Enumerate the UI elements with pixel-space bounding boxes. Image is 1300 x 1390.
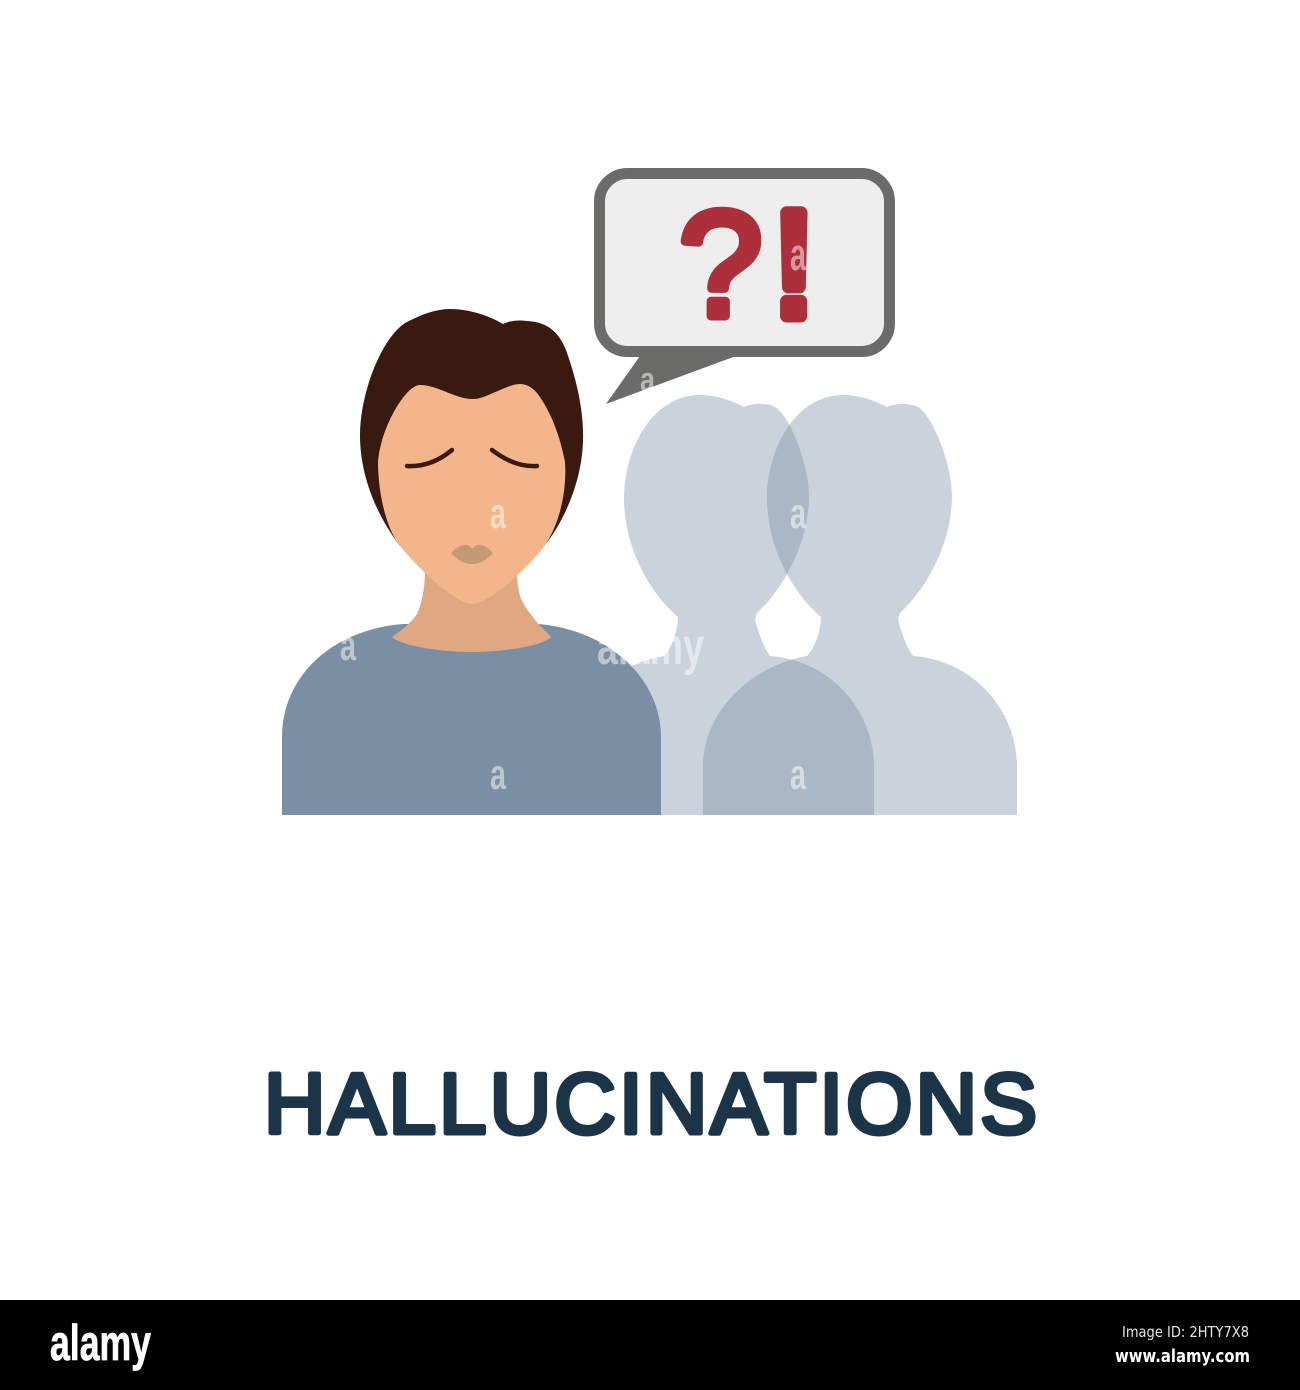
footer logo: alamy	[50, 1315, 151, 1371]
man: main figure	[282, 309, 661, 815]
watermarks: alamy	[597, 618, 704, 676]
watermarks: a	[790, 751, 807, 799]
watermarks: a	[490, 751, 507, 799]
question mark and exclamation mark: !	[773, 180, 815, 348]
speech bubble	[600, 174, 890, 404]
watermarks: a	[790, 229, 807, 280]
illustration: hallucinating person with phantom figures	[282, 174, 1017, 815]
man: lips	[451, 545, 493, 564]
phantom figure: left silhouette	[560, 395, 874, 815]
bubble body	[600, 174, 890, 352]
watermarks: a	[640, 361, 656, 399]
question mark and exclamation mark: ?	[679, 180, 762, 348]
man: face	[378, 384, 565, 604]
man: hair	[360, 309, 583, 546]
website: www.alamy.com	[1115, 1346, 1250, 1367]
watermarks: a	[790, 490, 807, 538]
watermarks	[340, 229, 807, 799]
man: right closed eye	[492, 450, 537, 466]
bubble tail	[606, 356, 736, 404]
man: neck	[392, 570, 551, 652]
man: torso	[282, 624, 661, 815]
man: left closed eye	[407, 450, 452, 466]
question mark and exclamation mark	[679, 180, 815, 348]
phantom figure: right silhouette	[703, 395, 1017, 815]
watermarks: a	[340, 622, 357, 670]
image id: Image ID: 2HTY7X8	[1122, 1323, 1249, 1341]
footer bar	[0, 1300, 1300, 1390]
watermarks: a	[490, 490, 507, 538]
title: HALLUCINATIONS	[264, 1057, 1037, 1152]
